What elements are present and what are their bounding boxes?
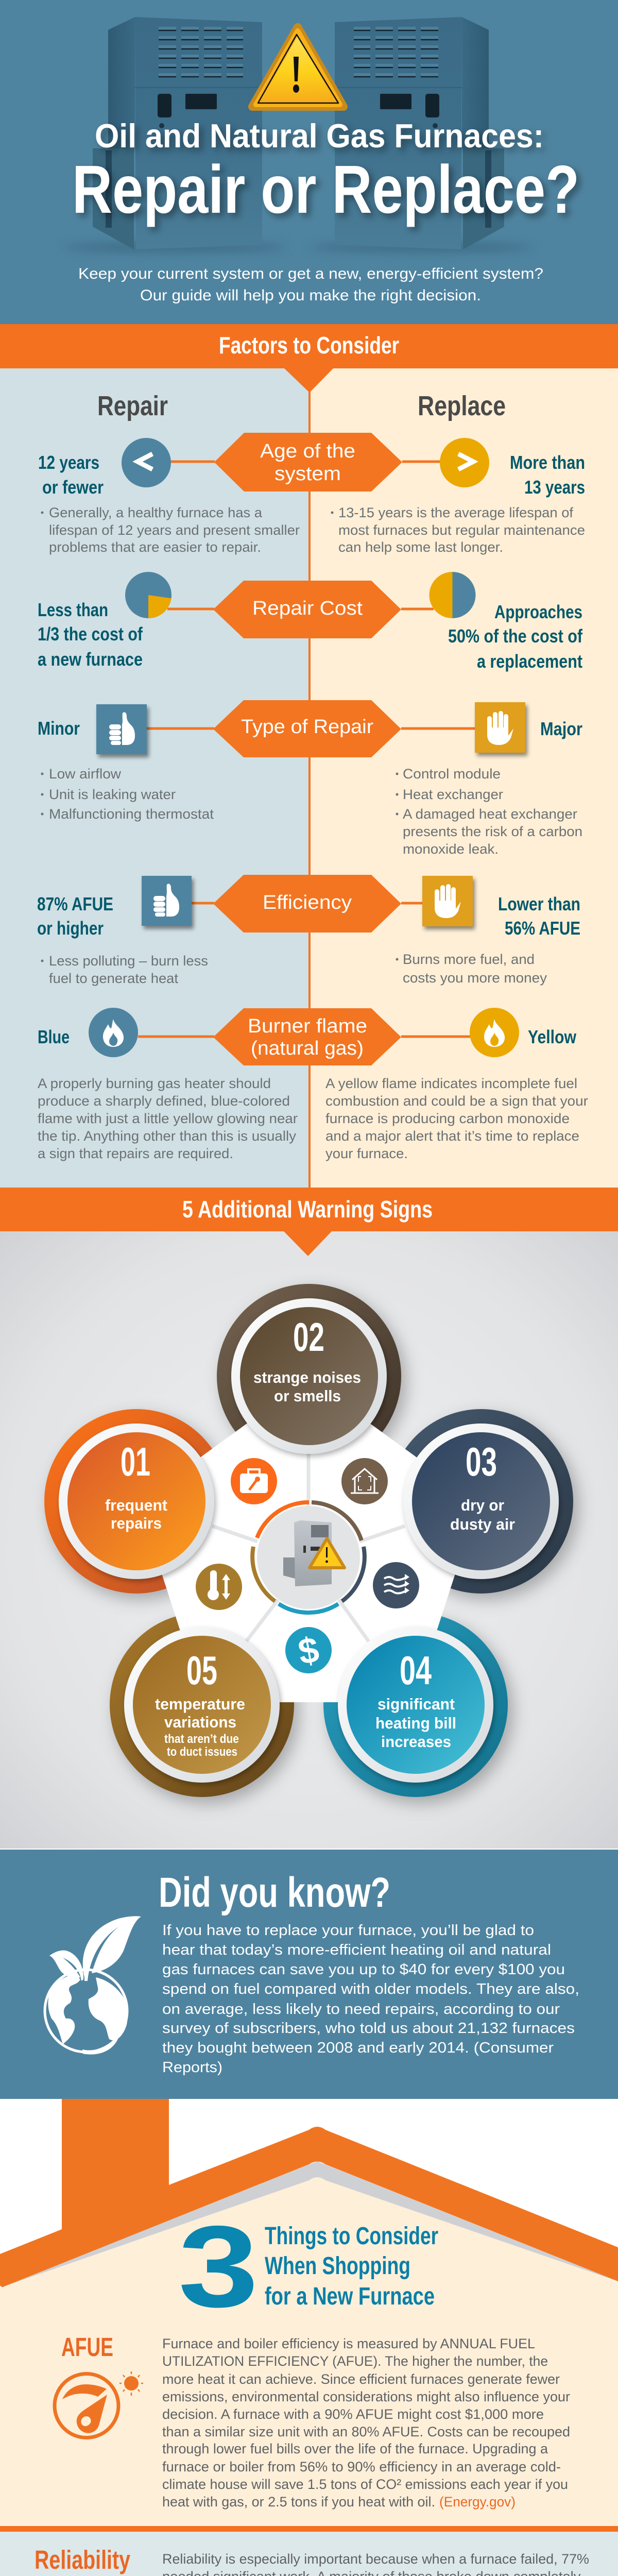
- hexagon: burner flame: Burner flame: [248, 1015, 367, 1037]
- text: AFUE body: emissions, environmental considerations might also influence your: [162, 2389, 570, 2404]
- icon: left furnace: [62, 17, 288, 251]
- text: did you know body: hear that today’s more-efficient heating oil and natural: [162, 1942, 551, 1958]
- text: burns more fuel: [396, 952, 547, 986]
- sign 04: significant heating bill increases: significant: [377, 1695, 455, 1713]
- sign 02: strange noises or smells: or smells: [274, 1387, 341, 1405]
- text: blue flame description: [38, 1076, 298, 1161]
- text: repair age note: [41, 505, 300, 555]
- panel: header: [0, 0, 618, 325]
- text: did you know body: Reports): [162, 2059, 222, 2076]
- text: repair age note: problems that are easier to repair.: [49, 539, 261, 555]
- text: burns more fuel: Burns more fuel, and: [403, 952, 535, 967]
- text: less polluting: fuel to generate heat: [49, 971, 178, 986]
- text: yellow flame description: your furnace.: [325, 1146, 408, 1161]
- column headings: Replace: [418, 391, 506, 421]
- list: major repairs: monoxide leak.: [403, 841, 499, 857]
- icon: stop hand: [475, 702, 525, 753]
- icon: dollar sign: [285, 1627, 332, 1673]
- text: reliability body: [162, 2551, 589, 2576]
- title: [72, 117, 579, 227]
- heading: 3 things to consider: 3: [178, 2201, 259, 2331]
- hexagon: age of the system: Age of the: [260, 440, 355, 462]
- sign 05: temperature variations: [124, 1627, 280, 1783]
- banner: factors to consider: [0, 324, 618, 393]
- label: lower than 56 percent AFUE: Lower than: [498, 893, 580, 914]
- section: reliability: [0, 2532, 618, 2576]
- text: less polluting: [41, 953, 208, 986]
- heading: reliability: Reliability: [35, 2545, 130, 2574]
- sign 04: significant heating bill increases: 04: [400, 1648, 432, 1693]
- sign 01: frequent repairs: 01: [121, 1439, 150, 1484]
- heading: did you know: Did you know?: [159, 1869, 390, 1916]
- heading: 3 things to consider: When Shopping: [265, 2252, 410, 2280]
- sign 05: temperature variations: that aren’t due: [164, 1732, 239, 1746]
- sign 05: temperature variations: 05: [186, 1648, 217, 1693]
- row: burner flame: [38, 1008, 588, 1161]
- label: more than 13 years: [510, 452, 585, 498]
- sign 04: significant heating bill increases: heating bill: [375, 1714, 456, 1732]
- icon: dollar sign: $: [295, 1629, 322, 1672]
- panel: three things to consider: [0, 2099, 618, 2576]
- text: AFUE body: UTILIZATION EFFICIENCY (AFUE). The higher the number, the: [162, 2353, 548, 2369]
- icon: wavy air arrows: [373, 1562, 419, 1608]
- list: minor repairs: [41, 766, 214, 822]
- hexagon: type of repair: [213, 700, 401, 757]
- sign 05: temperature variations: temperature: [155, 1695, 245, 1713]
- sign 03: dry or dusty air: dusty air: [450, 1515, 515, 1533]
- text: AFUE body: Furnace and boiler efficiency is measured by ANNUAL FUEL: [162, 2336, 535, 2351]
- text: burns more fuel: costs you more money: [403, 970, 547, 986]
- chart: one-third pie: [125, 572, 171, 618]
- text: replace age note: 13-15 years is the average lifespan of: [338, 505, 573, 520]
- column headings: [97, 391, 506, 421]
- sign 03: dry or dusty air: [403, 1423, 559, 1579]
- label: 87 percent AFUE or higher: [37, 893, 113, 939]
- banner: 5 additional warning signs: [0, 1188, 618, 1256]
- label: 87 percent AFUE or higher: 87% AFUE: [37, 893, 113, 914]
- label: major: Major: [540, 718, 582, 739]
- text: blue flame description: A properly burning gas heater should: [38, 1076, 271, 1091]
- text: blue flame description: produce a sharply defined, blue-colored: [38, 1093, 290, 1109]
- label: 12 years or fewer: or fewer: [42, 477, 104, 498]
- outer rings: [44, 1284, 573, 1797]
- sign 03: dry or dusty air: 03: [466, 1439, 497, 1484]
- label: lower than 56 percent AFUE: [498, 893, 580, 939]
- text: replace age note: [331, 505, 585, 555]
- hexagon: efficiency: Efficiency: [263, 892, 352, 913]
- heading: 3 things to consider: for a New Furnace: [265, 2283, 435, 2310]
- label: approaches 50 percent: 50% of the cost of: [448, 625, 583, 647]
- text: repair age note: Generally, a healthy furnace has a: [49, 505, 263, 520]
- text: did you know body: survey of subscribers, who told us about 21,132 furnaces: [162, 2020, 575, 2037]
- text: AFUE body: through lower fuel bills over the life of the furnace. Upgrading a: [162, 2441, 548, 2456]
- label: 12 years or fewer: 12 years: [38, 452, 99, 473]
- hexagon: age of the system: [214, 433, 402, 492]
- hexagon: age of the system: system: [274, 463, 341, 485]
- panel: factors to consider comparison: [0, 324, 618, 1188]
- list: minor repairs: Malfunctioning thermostat: [49, 806, 214, 822]
- house roof and chimney: [0, 2099, 618, 2526]
- row: repair cost: [38, 572, 583, 672]
- text: AFUE body: decision. A furnace with a 90% AFUE might cost $1,000 more: [162, 2406, 544, 2422]
- text: blue flame description: a sign that repairs are required.: [38, 1146, 233, 1161]
- text: did you know body: If you have to replace your furnace, you’ll be glad to: [162, 1922, 534, 1939]
- text: replace age note: can help some last longer.: [338, 539, 503, 555]
- text: did you know body: on average, less likely to need repairs, according to our: [162, 2001, 560, 2018]
- text: did you know body: gas furnaces can save you up to $40 for every $100 you: [162, 1961, 565, 1978]
- intro text: [78, 265, 543, 304]
- label: more than 13 years: More than: [510, 452, 585, 473]
- white pentagon: [139, 1379, 478, 1702]
- text: AFUE body: climate house will save 1.5 tons of CO² emissions each year if you: [162, 2477, 568, 2492]
- icon: house with airflow arrows: [341, 1458, 388, 1504]
- icon: globe with leaves: [45, 1916, 141, 2055]
- text: yellow flame description: furnace is producing carbon monoxide: [325, 1111, 570, 1126]
- icon: thumbs up: [96, 704, 147, 754]
- text: yellow flame description: combustion and could be a sign that your: [325, 1093, 588, 1109]
- label: approaches 50 percent: [448, 601, 583, 672]
- text: AFUE body: [162, 2336, 570, 2510]
- heading: AFUE: AFUE: [61, 2332, 113, 2362]
- label: blue: Blue: [38, 1026, 70, 1047]
- icon: blue flame: [89, 1008, 138, 1057]
- label: less than 1/3 the cost: a new furnace: [38, 649, 143, 670]
- text: AFUE body: (Energy.gov): [439, 2494, 516, 2510]
- text: blue flame description: flame with just a little yellow glowing near: [38, 1111, 298, 1126]
- banner: factors to consider: Factors to Consider: [219, 332, 399, 359]
- label: minor: Minor: [38, 718, 80, 739]
- row: type of repair: [38, 700, 582, 857]
- hexagon: repair cost: Repair Cost: [252, 598, 363, 619]
- icon: less than circle: [122, 438, 171, 487]
- text: AFUE body: heat with gas, or 2.5 tons if you heat with oil.: [162, 2494, 435, 2510]
- label: 87 percent AFUE or higher: or higher: [37, 918, 104, 939]
- label: lower than 56 percent AFUE: 56% AFUE: [505, 918, 580, 939]
- text: yellow flame description: [325, 1076, 588, 1161]
- label: yellow: Yellow: [528, 1026, 577, 1047]
- hexagon: type of repair: Type of Repair: [241, 716, 373, 738]
- heading: 3 things to consider: Things to Consider: [265, 2223, 438, 2250]
- list: minor repairs: Low airflow: [49, 766, 122, 782]
- hexagon: repair cost: [213, 581, 401, 638]
- banner: 5 additional warning signs: 5 Additional Warning Signs: [182, 1196, 433, 1223]
- hexagon: burner flame: [213, 1008, 401, 1065]
- list: major repairs: Control module: [403, 766, 501, 782]
- icon: stop hand: [422, 876, 473, 926]
- label: approaches 50 percent: Approaches: [494, 601, 582, 622]
- sign 01: frequent repairs: frequent: [105, 1496, 167, 1514]
- text: AFUE body: furnace or boiler from 56% to 90% efficiency in an average cold-: [162, 2459, 561, 2475]
- list: major repairs: presents the risk of a carbon: [403, 824, 582, 839]
- text: blue flame description: the tip. Anything other than this is usually: [38, 1128, 297, 1144]
- label: approaches 50 percent: a replacement: [477, 651, 582, 672]
- label: 12 years or fewer: [38, 452, 104, 498]
- icon: right furnace: [308, 17, 535, 251]
- sign 04: significant heating bill increases: increases: [381, 1733, 451, 1751]
- text: less polluting: Less polluting – burn less: [49, 953, 208, 969]
- sign 02: strange noises or smells: [231, 1298, 387, 1454]
- sign 02: strange noises or smells: strange noises: [253, 1368, 361, 1386]
- hexagon: efficiency: [213, 875, 401, 933]
- list: major repairs: [396, 766, 582, 857]
- sign 05: temperature variations: variations: [164, 1713, 236, 1731]
- section: AFUE: [55, 2332, 570, 2510]
- text: reliability body: Reliability is especially important because when a furnace failed, 77%: [162, 2551, 589, 2567]
- text: did you know body: they bought between 2008 and early 2014. (Consumer: [162, 2040, 554, 2056]
- text: replace age note: most furnaces but regular maintenance: [338, 522, 585, 538]
- icon: thumbs up: [142, 876, 192, 926]
- icon: warning triangle: [252, 27, 344, 107]
- sign 01: frequent repairs: [59, 1423, 214, 1579]
- list: major repairs: Heat exchanger: [403, 787, 503, 802]
- icon: wrench in toolbox: [231, 1458, 277, 1504]
- panel: did you know: [0, 1850, 618, 2099]
- icon: greater than circle: [440, 438, 489, 487]
- sign 05: temperature variations: to duct issues: [167, 1745, 237, 1759]
- row: age of the system: [38, 433, 585, 555]
- list: minor repairs: Unit is leaking water: [49, 787, 176, 802]
- panel: five warning signs: [0, 1188, 618, 1849]
- text: AFUE body: more heat it can achieve. Since efficient furnaces generate fewer: [162, 2371, 560, 2387]
- label: less than 1/3 the cost: Less than: [38, 599, 108, 620]
- label: less than 1/3 the cost: [38, 599, 143, 670]
- icon: yellow flame: [470, 1008, 519, 1057]
- row: efficiency: [37, 875, 580, 986]
- sign 01: frequent repairs: repairs: [111, 1514, 162, 1532]
- heading: 3 things to consider: [178, 2201, 438, 2331]
- icon: thermometer with arrows: [196, 1564, 242, 1610]
- text: yellow flame description: A yellow flame indicates incomplete fuel: [325, 1076, 577, 1091]
- radial dividers: [212, 1454, 405, 1641]
- text: did you know body: [162, 1922, 579, 2076]
- sign 02: strange noises or smells: 02: [293, 1314, 324, 1360]
- intro text: Our guide will help you make the right decision.: [140, 287, 481, 304]
- sign 03: dry or dusty air: dry or: [461, 1496, 504, 1514]
- label: more than 13 years: 13 years: [524, 477, 585, 498]
- icon: furnace with warning: [283, 1520, 345, 1586]
- hexagon: burner flame: (natural gas): [251, 1038, 364, 1059]
- text: did you know body: spend on fuel compared with older models. They are also,: [162, 1981, 579, 1997]
- chart: half pie: [430, 572, 476, 618]
- label: less than 1/3 the cost: 1/3 the cost of: [38, 623, 143, 645]
- column headings: Repair: [97, 391, 168, 421]
- center furnace hub: [252, 1502, 365, 1613]
- sign 04: significant heating bill increases: [338, 1627, 493, 1783]
- icon: gauge and sun: [55, 2371, 143, 2438]
- intro text: Keep your current system or get a new, energy-efficient system?: [78, 265, 543, 282]
- text: AFUE body: than a similar size unit with an 80% AFUE. Costs can be recouped: [162, 2424, 570, 2439]
- text: yellow flame description: and a major alert that it’s time to replace: [325, 1128, 579, 1144]
- list: major repairs: A damaged heat exchanger: [403, 806, 577, 822]
- title: Oil and Natural Gas Furnaces:: [95, 117, 544, 155]
- text: repair age note: lifespan of 12 years and present smaller: [49, 522, 300, 538]
